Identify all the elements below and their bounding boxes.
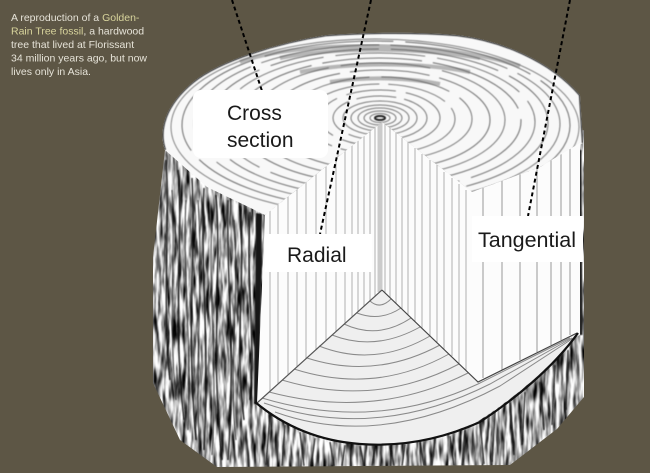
wedge floor with growth rings	[255, 290, 578, 445]
label: tangential	[472, 216, 583, 262]
caption text: lives only in Asia.	[11, 66, 91, 78]
tree stump illustration	[150, 25, 590, 470]
caption text: tree that lived at Florissant	[11, 39, 134, 51]
dashed line: radial	[320, 0, 371, 234]
top face with growth rings	[162, 32, 583, 215]
bark	[150, 130, 590, 470]
dashed line: cross section	[232, 0, 262, 91]
caption text: 34 million years ago, but now	[11, 52, 147, 64]
label: tangential: Tangential	[478, 229, 576, 252]
label: cross section: Cross	[227, 102, 282, 125]
label: cross section	[193, 90, 328, 158]
caption text: A reproduction of a Golden-	[11, 12, 139, 24]
label: radial	[265, 234, 372, 272]
radial and tangential walls	[257, 122, 580, 402]
label: cross section: section	[227, 129, 294, 152]
dashed line: tangential	[528, 0, 570, 216]
label: radial: Radial	[287, 244, 347, 267]
caption text: Rain Tree fossil, a hardwood	[11, 26, 144, 38]
